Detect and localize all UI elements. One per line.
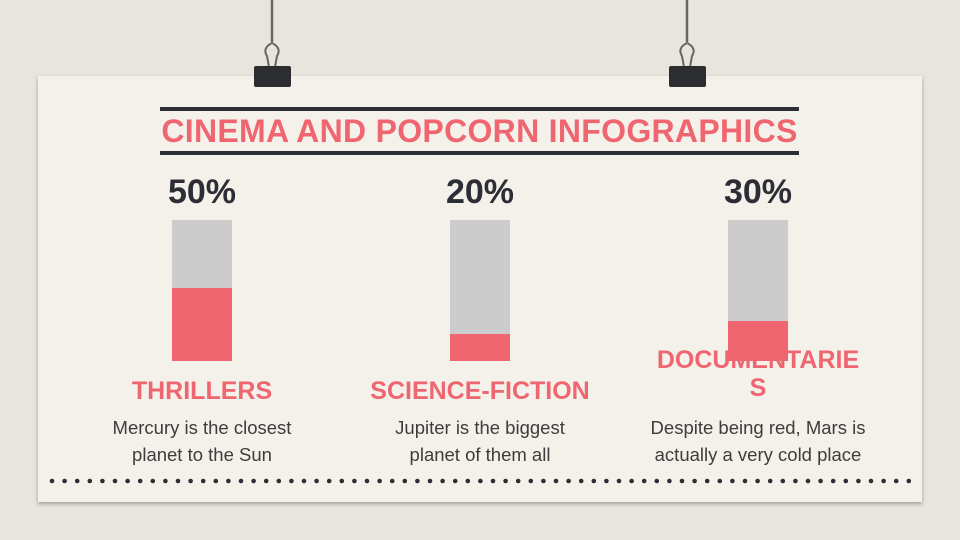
bar 30 <box>728 220 788 361</box>
desc thrillers: Mercury is the closest <box>113 417 291 438</box>
desc thrillers: planet to the Sun <box>132 444 272 465</box>
icon: binder clip right <box>669 0 706 87</box>
percent 30: 30% <box>724 173 792 211</box>
label documentaries <box>657 346 859 402</box>
desc documentaries <box>651 417 865 465</box>
label documentaries: DOCUMENTARIE <box>657 346 859 374</box>
label science fiction: SCIENCE-FICTION <box>370 377 590 405</box>
label documentaries: S <box>750 374 766 402</box>
desc science fiction: planet of them all <box>410 444 550 465</box>
dotted divider <box>50 478 912 484</box>
percent 20: 20% <box>446 173 514 211</box>
title: CINEMA AND POPCORN INFOGRAPHICS <box>161 113 798 149</box>
desc documentaries: actually a very cold place <box>655 444 861 465</box>
desc thrillers <box>113 417 292 465</box>
desc science fiction <box>395 417 565 465</box>
label thrillers: THRILLERS <box>132 377 272 405</box>
card panel <box>38 76 922 502</box>
desc science fiction: Jupiter is the biggest <box>395 417 565 438</box>
desc documentaries: Despite being red, Mars is <box>651 417 865 438</box>
bar 20 <box>450 220 510 361</box>
bar 50 <box>172 220 232 361</box>
icon: binder clip left <box>254 0 291 87</box>
percent 50: 50% <box>168 173 236 211</box>
